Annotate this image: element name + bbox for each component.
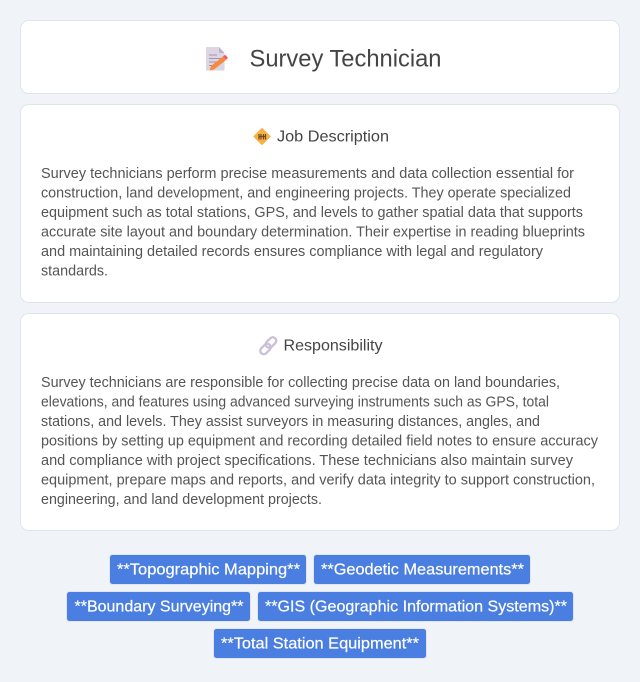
tag: topographic mapping: **Topographic Mapping** [117,562,300,578]
icon: chain link [259,336,278,356]
tag: boundary surveying: **Boundary Surveying** [74,598,244,616]
text block: job description: equipment such as total stations, GPS, and levels to gather spatial data that supports [41,205,583,221]
panel: responsibility [20,314,620,530]
text block: responsibility: engineering, and land development projects. [41,492,322,508]
text block: responsibility [41,375,599,508]
icon: memo with pencil [206,47,228,70]
text block: job description [41,166,585,280]
text block: job description: accurate site layout and boundary determination. Their expertise in reading blueprints [41,225,585,241]
tag: topographic mapping [110,554,306,584]
text block: responsibility: equipment, prepare maps and reports, and verify data integrity to support construction, [41,472,595,488]
tag: geodetic measurements: **Geodetic Measurements** [321,562,524,578]
tag: total station equipment [214,628,426,658]
text block: job description: construction, land development, and engineering projects. They operate specialized [41,186,571,202]
text block: responsibility: positions by setting up equipment and recording detailed field notes to ensure accuracy [41,434,599,450]
panel: job description [20,104,620,302]
heading: responsibility: Responsibility [284,338,382,354]
tag: total station equipment: **Total Station Equipment** [221,636,419,652]
text block: responsibility: Survey technicians are responsible for collecting precise data on land boundaries, [41,375,560,391]
icon: orange diamond sign [254,128,270,144]
heading: job description: Job Description [277,128,389,146]
tag: GIS [258,592,574,622]
text block: job description: Survey technicians perform precise measurements and data collection essential for [41,166,574,182]
panel: title card [20,20,620,94]
tag: geodetic measurements [314,554,530,584]
text block: job description: and maintaining detailed records ensures compliance with legal and regulatory [41,244,544,260]
tag: GIS: **GIS (Geographic Information Systems)** [265,598,567,616]
text block: job description: standards. [41,264,108,280]
tag: boundary surveying [66,592,250,622]
title: Survey Technician [250,46,442,72]
text block: responsibility: stations, and levels. They assist surveyors in measuring distances, angles, and [41,414,540,430]
text block: responsibility: and compliance with project specifications. These technicians also maintain survey [41,453,574,469]
text block: responsibility: elevations, and features using advanced surveying instruments such as GPS, total [41,395,549,411]
